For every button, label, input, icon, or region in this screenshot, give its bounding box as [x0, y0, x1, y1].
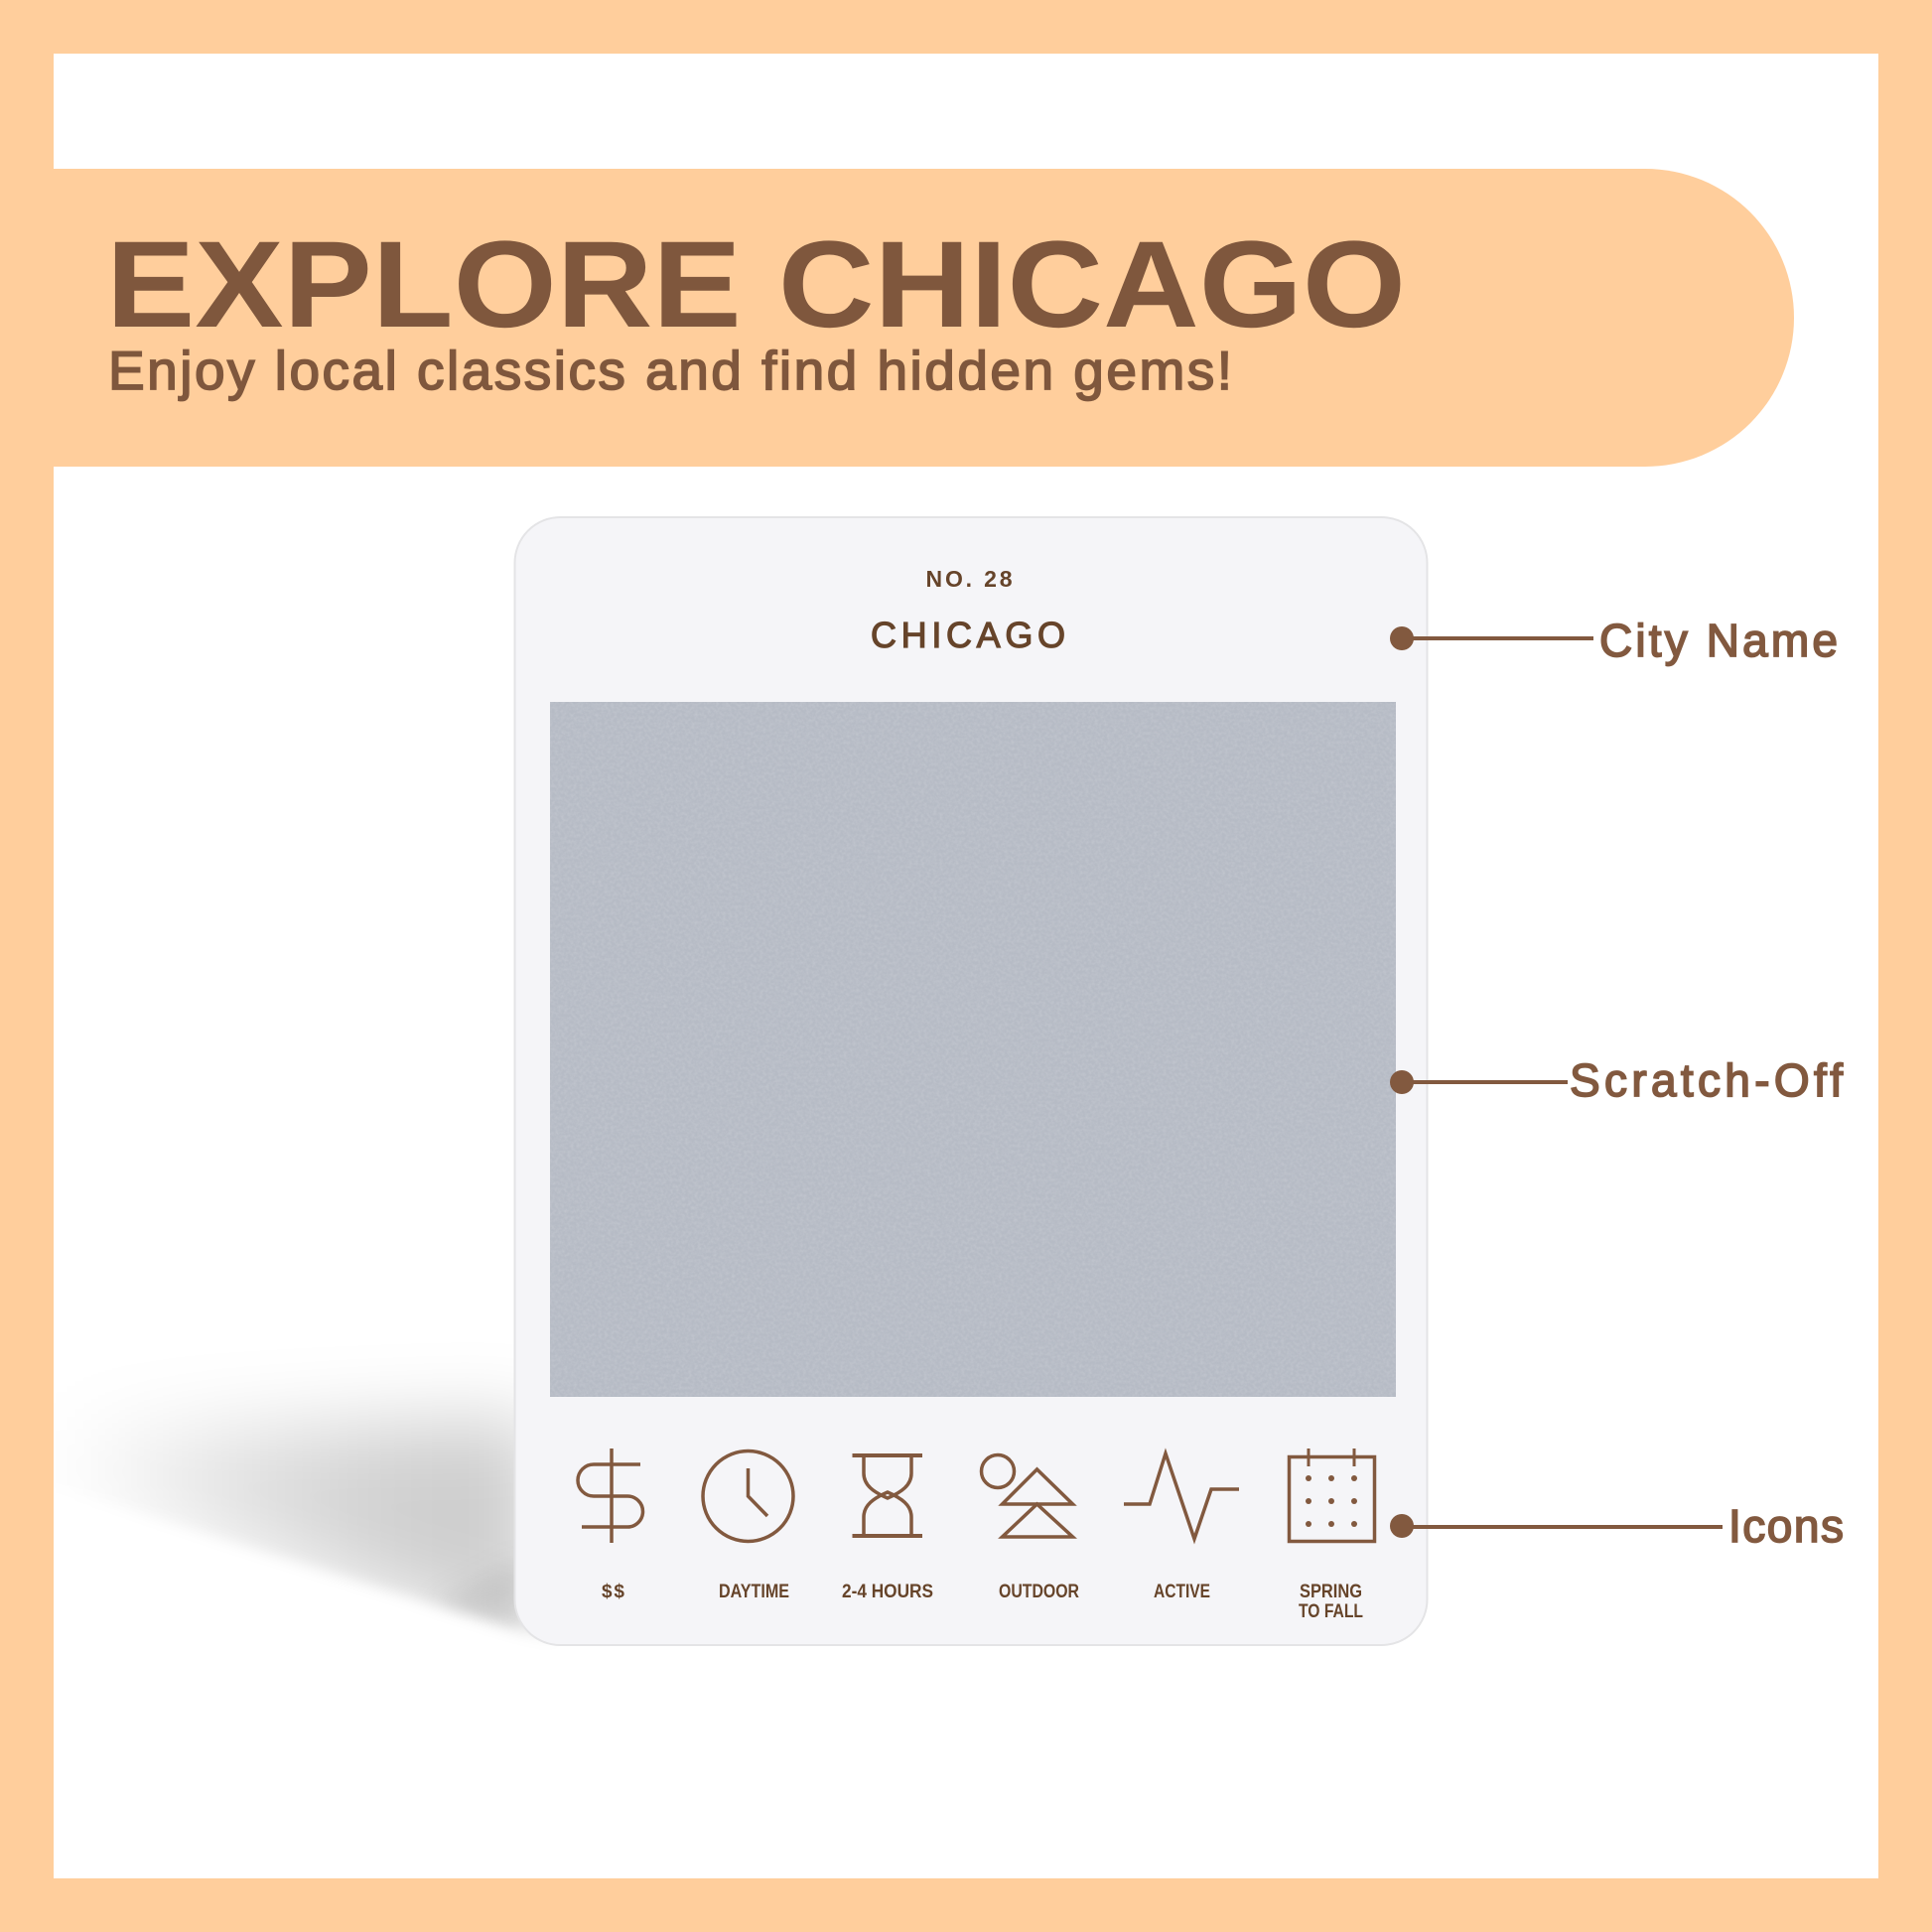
icon: hourglass: [852, 1455, 922, 1536]
icon labels: $$: [602, 1582, 624, 1602]
callout: icons: [1390, 1500, 1844, 1552]
icon: clock: [703, 1451, 793, 1541]
callout: scratch-off: Scratch-Off: [1570, 1054, 1843, 1106]
card city name: CHICAGO: [871, 615, 1065, 655]
card: [514, 517, 1428, 1645]
icon labels: SPRING: [1300, 1582, 1362, 1602]
card number: NO. 28: [925, 566, 1013, 592]
icon: calendar: [1289, 1449, 1374, 1541]
callout: city name: [1390, 615, 1838, 666]
callout: city name: City Name: [1599, 615, 1838, 666]
icon: dollar sign: [578, 1449, 643, 1543]
icon labels: 2-4 HOURS: [842, 1582, 933, 1602]
icon labels: [602, 1582, 1363, 1622]
icon labels: DAYTIME: [719, 1582, 789, 1602]
icon: outdoor: [981, 1455, 1072, 1537]
scratch-off panel: [550, 702, 1396, 1397]
callout: scratch-off: [1390, 1054, 1843, 1106]
title: EXPLORE CHICAGO: [106, 216, 1406, 353]
callout: icons: Icons: [1728, 1500, 1844, 1552]
icon: activity pulse: [1124, 1453, 1239, 1539]
icon labels: ACTIVE: [1154, 1582, 1210, 1602]
card cast shadow: [20, 1420, 536, 1638]
icon labels: TO FALL: [1299, 1601, 1363, 1622]
header banner: [0, 169, 1794, 467]
subtitle: Enjoy local classics and find hidden gems!: [108, 340, 1232, 401]
icon labels: OUTDOOR: [999, 1582, 1079, 1602]
